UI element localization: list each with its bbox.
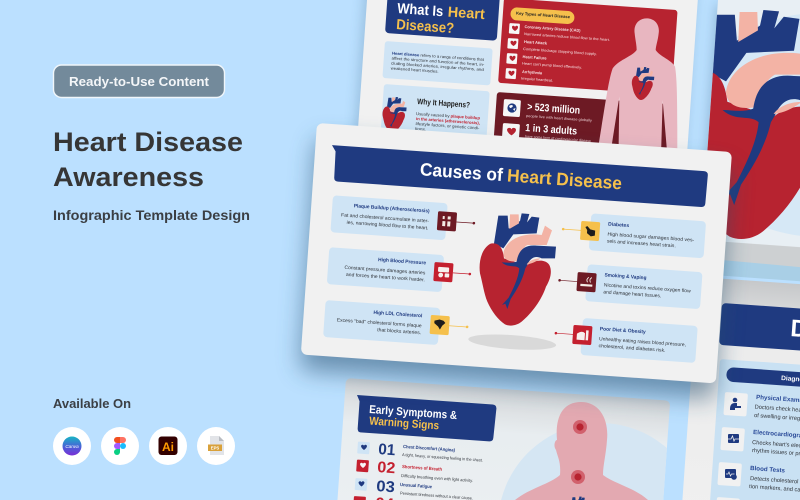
card: high blood pressure: and forces the heart to work harder.: [346, 272, 425, 283]
row: blood tests: [717, 462, 800, 496]
body silhouette with warning dots: [515, 402, 648, 500]
icon: adobe illustrator: Ai: [162, 440, 174, 454]
symptom row 04: [353, 495, 445, 500]
available on heading: Available On: [53, 396, 131, 411]
row: blood tests: Blood Tests: [750, 465, 786, 474]
slide: early symptoms: [338, 378, 670, 500]
card: plaque buildup: Plaque Buildup (Atherosclerosis): [354, 203, 430, 215]
icon: cholesterol: [430, 315, 450, 335]
definition card: weakened heart muscles.: [391, 66, 439, 74]
key types list: Irregular heartbeat.: [521, 77, 553, 83]
diagnosis panel: [707, 359, 800, 500]
warning dot: throat: [571, 470, 585, 484]
statistics maroon card: have some form of cardiovascular disease: [525, 135, 591, 143]
title box: [385, 0, 501, 41]
key types list: Heart can't pump blood effectively.: [522, 62, 582, 70]
icon: smoking: [576, 272, 597, 292]
symptom row 02: 02: [377, 459, 396, 477]
card: smoking and vaping: [585, 264, 703, 309]
icon: blood pressure: [433, 262, 454, 282]
key types list: Complete blockage stopping blood supply.: [523, 47, 597, 56]
title box: What Is: [397, 1, 444, 20]
key types list: Coronary Artery Disease (CAD): [524, 24, 581, 33]
card: poor diet and obesity: Unhealthy eating raises blood pressure,: [599, 336, 686, 348]
symptom row 03: [355, 478, 473, 500]
card: plaque buildup: Fat and cholesterol accumulate in arter-: [341, 212, 430, 225]
key types red card: [498, 0, 678, 95]
connector: smoking: [558, 279, 578, 283]
torso backdrop circle: [501, 424, 666, 500]
why it happens card: Why It Happens?: [417, 97, 470, 110]
title banner: Heart Disease: [507, 165, 623, 193]
why it happens card: in the arteries (atherosclerosis),: [416, 116, 480, 125]
card: smoking and vaping: Nicotine and toxins reduce oxygen flow: [604, 282, 691, 295]
key types list: Narrowed arteries reduce blood flow to the heart.: [524, 32, 610, 42]
title banner: [329, 145, 708, 207]
key types pill: [510, 7, 575, 24]
key types list: Arrhythmia: [522, 69, 543, 75]
statistics maroon card: people live with heart disease globally: [526, 114, 592, 123]
title box: Heart: [447, 5, 485, 23]
icon: globe: [503, 99, 521, 117]
icon: canva: [53, 427, 91, 465]
icon: canva: Canva: [65, 444, 79, 449]
badge: ready-to-use content: Ready-to-Use Content: [69, 74, 210, 89]
icon: figma: [101, 427, 139, 465]
key types list: Heart Attack: [524, 39, 548, 46]
why it happens card: tions.: [415, 126, 426, 132]
icon: eps file: EPS: [211, 446, 219, 451]
card: high ldl cholesterol: that blocks arteries.: [377, 327, 421, 336]
card: high ldl cholesterol: Excess "bad" cholesterol forms plaque: [337, 317, 422, 329]
card: high ldl cholesterol: High LDL Cholesterol: [373, 310, 423, 319]
definition card: affect the structure and function of the heart, in-: [391, 56, 485, 67]
symptom row 01: Chest Discomfort (Angina): [403, 444, 456, 453]
why it happens card: lifestyle factors, or genetic condi-: [415, 121, 480, 131]
warning dot: head: [573, 420, 587, 434]
connector: blood pressure: [453, 272, 471, 275]
symptoms banner: Warning Signs: [369, 416, 439, 432]
title box: Disease?: [396, 17, 455, 37]
diagnosis banner: [719, 303, 800, 357]
main title: [53, 127, 243, 192]
key types list: [505, 23, 610, 83]
badge: ready-to-use content: [54, 65, 224, 98]
icon: diabetes: [580, 221, 600, 241]
key types pill: Key Types of Heart Disease: [516, 11, 571, 19]
card: poor diet and obesity: Poor Diet & Obesity: [600, 326, 646, 335]
slide: diagnosis (lower right): [677, 240, 800, 500]
card: smoking and vaping: Smoking & Vaping: [604, 272, 647, 281]
why it happens card: Usually caused by plaque buildup: [416, 111, 481, 120]
symptom row 03: 03: [376, 478, 396, 496]
left promo column: [53, 65, 250, 465]
symptom row 02: [356, 459, 473, 483]
connector: ldl: [449, 324, 469, 328]
statistics maroon card: 1 in 3 adults: [525, 122, 578, 138]
subtitle: Infographic Template Design: [53, 207, 250, 223]
row: next icon: [715, 497, 740, 500]
main title: Heart Disease: [53, 127, 243, 157]
definition card: [382, 41, 493, 85]
statistics maroon card: [493, 92, 675, 164]
card: poor diet and obesity: cholesterol, and diabetes risk.: [598, 343, 666, 354]
card: diabetes: [589, 213, 706, 258]
card: high blood pressure: [327, 247, 444, 292]
main anatomical heart: [480, 213, 556, 326]
icon: adobe illustrator: [149, 427, 187, 465]
row: physical examination: [723, 392, 800, 424]
symptom row 01: [357, 441, 483, 463]
card: high blood pressure: Constant pressure damages arteries: [344, 265, 426, 276]
why it happens card: [380, 84, 490, 151]
diagnosis pill: [726, 367, 800, 390]
symptom row 01: A tight, heavy, or squeezing feeling in the chest.: [402, 452, 483, 463]
heart shadow: [468, 332, 557, 352]
large heart illustration: [707, 10, 800, 239]
connector: plaque: [456, 221, 475, 225]
symptom row 03: Unusual Fatigue: [400, 482, 433, 489]
icon: plaque: [437, 211, 457, 231]
symptom row 01: 01: [378, 441, 396, 459]
main title: Awareness: [53, 162, 204, 192]
symptoms banner: [354, 395, 497, 442]
card: diabetes: Diabetes: [608, 222, 630, 229]
card: poor diet and obesity: [580, 318, 698, 363]
card: plaque buildup: ies, narrowing blood flow to the heart.: [346, 220, 429, 232]
connector: diabetes: [562, 228, 581, 232]
slide: large heart (right): [700, 0, 800, 248]
card: smoking and vaping: and damage heart tissues.: [603, 289, 661, 299]
human silhouette with heart: [595, 18, 677, 167]
symptoms banner: Early Symptoms &: [369, 404, 457, 422]
slide: causes of heart disease: [300, 123, 732, 399]
card: plaque buildup: [330, 195, 448, 240]
icon: eps file: [197, 427, 235, 465]
slide: what is heart disease: [350, 0, 700, 216]
icon: heart stat: [502, 123, 520, 141]
card: diabetes: sels and increases heart strain.: [607, 239, 676, 249]
definition card: Heart disease refers to a range of conditions that: [392, 51, 485, 62]
card: high blood pressure: High Blood Pressure: [378, 257, 426, 266]
symptom row 02: Shortness of Breath: [402, 464, 442, 472]
connector: diet: [555, 332, 574, 336]
card: diabetes: High blood sugar damages blood ves-: [607, 232, 695, 244]
icon: poor diet: [572, 325, 592, 345]
symptom row 02: Difficulty breathing even with light activity.: [401, 473, 473, 483]
card: high ldl cholesterol: [323, 300, 440, 345]
title banner: Causes of: [419, 159, 504, 185]
row: electrocardiogram: [720, 427, 800, 459]
definition card: cluding blocked arteries, irregular rhythms, and: [391, 61, 484, 72]
key types list: Heart Failure: [522, 54, 547, 61]
statistics maroon card: > 523 million: [527, 101, 580, 117]
small heart on chest: [567, 496, 590, 500]
